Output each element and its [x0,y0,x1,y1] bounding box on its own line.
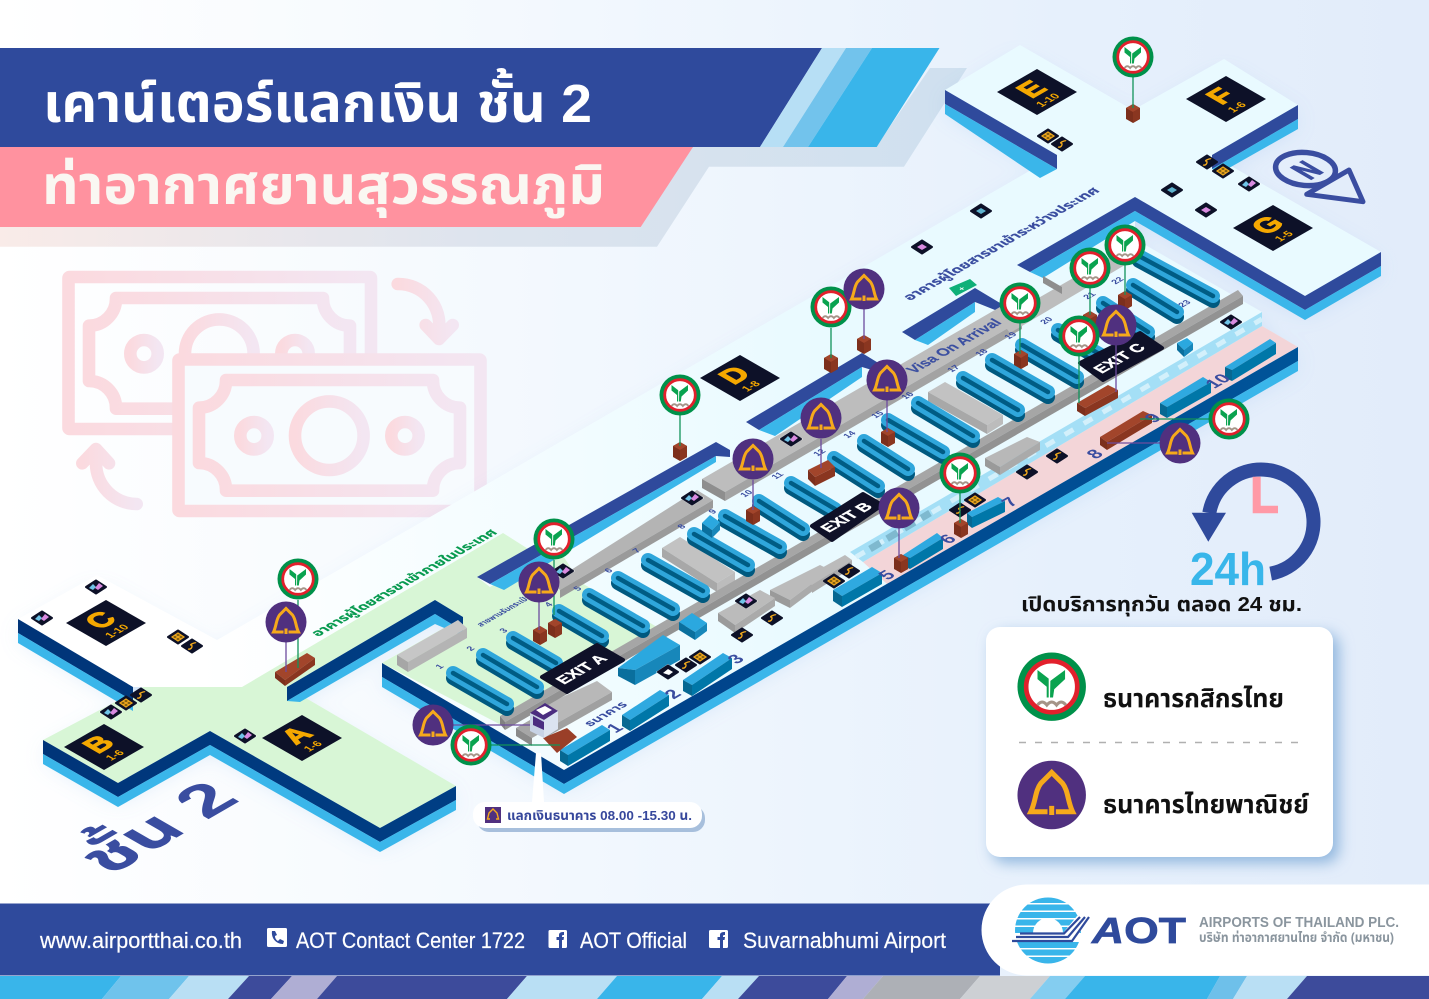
24 hour clock icon: 24h [1190,543,1266,595]
lower dark blue walls [18,347,1298,842]
footer bar [0,904,1429,999]
counter row numbers: 20 [1038,315,1055,326]
gate plate A: 1-6 [301,740,325,753]
gate plate G: G [1245,212,1292,239]
gate plate E: 1-10 [1034,92,1063,109]
gate door numbers: 5 [874,567,900,583]
gate plate D [700,355,780,401]
terminal floor plan [18,36,1381,852]
glass strip [850,312,1262,562]
contact center: AOT Contact Center 1722 [296,928,525,953]
counter row numbers [433,275,1193,670]
gate plate A: A [274,722,320,749]
AOT official: AOT Official [580,928,687,953]
counter row numbers: 9 [706,508,719,515]
gate plate G [1233,205,1313,251]
floor text: international arrivals: อาคารผู้โดยสารขาเข้าระหว่างประเทศ [899,184,1105,304]
counter row numbers: 19 [1002,330,1019,341]
counter row numbers: 7 [630,547,643,554]
pins: Kasikorn Bank on top [450,316,1100,766]
gate door numbers: 1 [602,720,628,736]
counter row numbers: 5 [571,585,584,592]
AOT logo panel [982,884,1429,976]
legend: Siam Commercial Bank [1017,761,1309,829]
exit plate C [1080,333,1162,380]
floor text: bank: ธนาคาร [580,699,631,729]
website: www.airportthai.co.th [39,928,242,953]
footer stripes [0,976,1429,999]
counter row numbers: 12 [811,447,828,458]
gate door numbers: 8 [1082,446,1108,462]
counter row numbers: 15 [869,409,886,420]
exit plate C: EXIT C [1090,341,1150,376]
gate door numbers: 3 [723,651,749,667]
icon: phone [267,928,287,947]
gate plate B: 1-6 [103,749,127,762]
upper light blue walls [490,104,1381,590]
lower light blue walls [18,361,1298,852]
gate plate C: C [78,607,124,634]
counter row numbers: 10 [738,488,755,499]
legend: Kasikorn Bank: ธนาคารกสิกรไทย [1103,683,1284,713]
callout: SCB exchange hours: แลกเงินธนาคาร 08.00 -15.30 น. [507,808,692,823]
counter row numbers: 17 [945,363,962,374]
upper dark blue walls [477,90,1381,584]
gray blocks [397,250,1130,746]
legend: Kasikorn Bank [1017,652,1284,721]
gate plate C [66,600,146,646]
floor surface [18,45,1381,828]
floor label: floor 2: ชั้น 2 [56,769,254,883]
counter row numbers: 4 [542,601,555,608]
counter row numbers: 18 [973,347,990,358]
title line 2: ท่าอากาศยานสุวรรณภูมิ [42,156,605,218]
green medical marker [949,279,977,296]
floor facility icons [30,130,1261,744]
gate plate G: 1-5 [1272,230,1296,243]
leader lines [286,77,1209,745]
exit plate B [812,494,882,540]
counter row numbers: 3 [497,627,510,634]
gate plate F: F [1200,84,1243,109]
gate plate E [997,69,1077,115]
pins: Kasikorn Bank under SCB [278,36,1250,600]
title line 1: เคาน์เตอร์แลกเงิน ชั้น 2 [43,68,592,134]
counter row numbers: 8 [675,523,688,530]
gate plate F: 1-6 [1225,101,1249,114]
floor text: visa on arrival: Visa On Arrival [903,316,1006,376]
24 hour clock icon [1190,469,1314,595]
gate plate C: 1-10 [103,623,132,640]
blue kiosks and gate desks [560,338,1276,766]
Suvarnabhumi Airport: Suvarnabhumi Airport [743,928,946,953]
brown bank stands small [533,104,1140,645]
exit plate A [542,645,623,692]
gate door numbers: 7 [997,494,1023,510]
title banner [0,48,967,247]
open every day caption: เปิดบริการทุกวัน ตลอด 24 ชม. [1021,594,1302,616]
brown bank stands large [275,385,1152,753]
gate plate B [64,724,144,770]
counter row numbers: 16 [899,390,916,401]
AOT wordmark: AOT [1091,910,1186,951]
gate plate B: B [76,731,122,758]
legend panel [986,627,1333,857]
company name Thai: บริษัท ท่าอากาศยานไทย จำกัด (มหาชน) [1199,930,1394,945]
exit plate A: EXIT A [553,653,612,687]
gate plate D: 1-8 [739,380,763,393]
gate door numbers: 10 [1200,371,1235,391]
green medical marker: + [956,285,968,292]
logo roundel [1010,897,1091,964]
floor text: baggage claim: สายพานรับกระเป๋า [474,594,533,628]
counter row numbers: 14 [841,429,858,440]
counter row numbers: 23 [1176,298,1193,309]
currency exchange kiosk [530,703,558,738]
company name English: AIRPORTS OF THAILAND PLC. [1199,914,1399,931]
gate door numbers [602,371,1235,736]
pins: Siam Commercial Bank [266,268,1200,746]
north compass: N [1284,157,1331,184]
icon: facebook [548,930,567,948]
gate door numbers: 9 [1140,410,1166,426]
callout: SCB exchange hours [473,753,705,832]
background illustration: banknotes [68,277,480,511]
check-in counter rows [453,256,1213,709]
icon: facebook [709,930,728,948]
north compass [1274,150,1363,202]
gate plate A [262,715,342,761]
gate door numbers: 6 [935,531,961,547]
green domestic floor [43,533,657,828]
gate plate F [1186,76,1266,122]
exit plate B: EXIT B [817,501,877,535]
gate door numbers: 2 [660,686,686,702]
counter row numbers: 22 [1109,275,1126,286]
counter row numbers: 1 [433,663,446,670]
counter row numbers: 21 [1081,290,1098,301]
pink strip [863,326,1298,584]
gate plate E: E [1010,77,1054,102]
counter row numbers: 11 [769,471,786,480]
counter row numbers: 6 [602,567,615,574]
main corridor [500,290,1243,730]
counter row numbers: 2 [464,645,477,652]
legend: Siam Commercial Bank: ธนาคารไทยพาณิชย์ [1103,789,1309,819]
floor text: domestic arrivals: อาคารผู้โดยสารขาเข้าภายในประเทศ [308,527,503,640]
gate plate D: D [712,362,758,389]
